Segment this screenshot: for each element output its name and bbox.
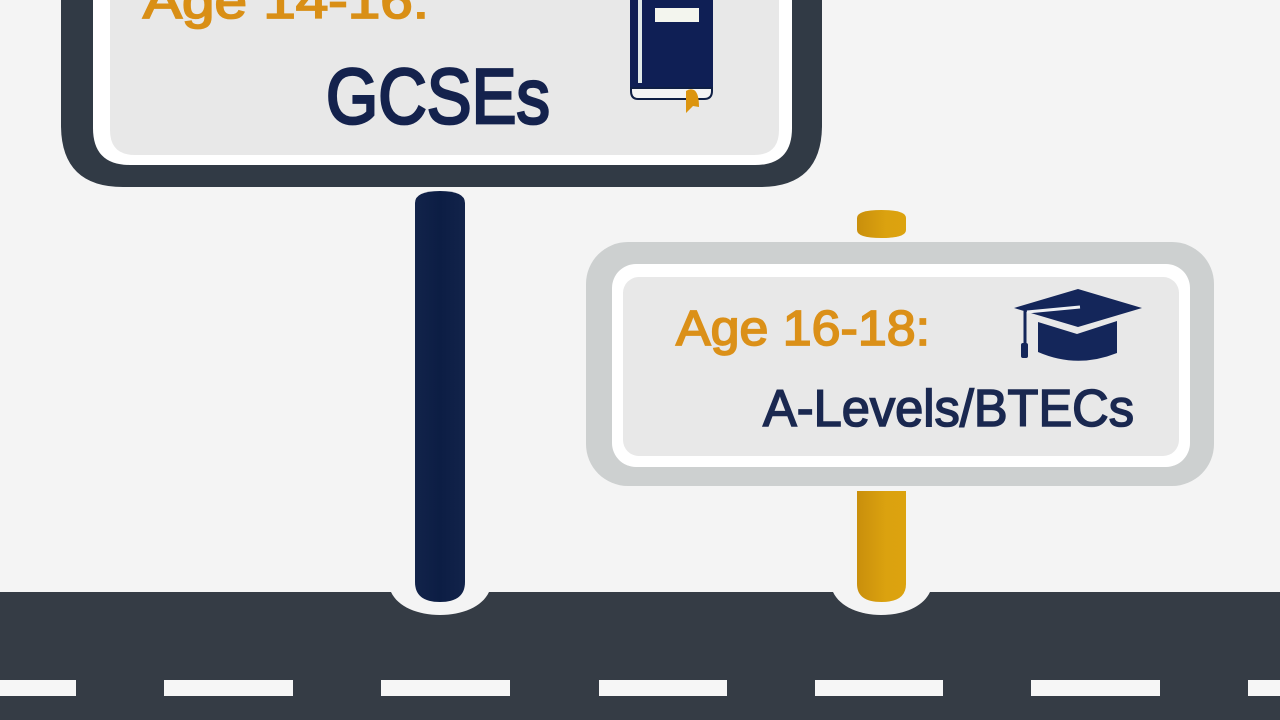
- A-Levels sign post: lower section: [857, 491, 906, 602]
- sign face: [623, 277, 1179, 456]
- label: GCSEs: GCSEs: [326, 52, 550, 140]
- icon: graduation cap: [1014, 289, 1142, 361]
- sign frame: [586, 242, 1214, 486]
- GCSE sign: [61, 0, 822, 187]
- road dashes: [0, 680, 1280, 696]
- sign frame: [61, 0, 822, 187]
- GCSE sign post: [415, 191, 465, 602]
- sign face: [110, 0, 779, 155]
- sign white border: [612, 264, 1190, 467]
- icon: book: [630, 0, 713, 113]
- label: A-Levels/BTECs: A-Levels/BTECs: [763, 380, 1134, 438]
- A-Levels sign: [586, 242, 1214, 486]
- road notch: A-Levels post: [833, 592, 930, 615]
- heading: Age 16-18: Age 16-18:: [676, 302, 930, 356]
- A-Levels sign post: top cap: [857, 210, 906, 238]
- road: [0, 592, 1280, 720]
- road notch: GCSE post: [391, 592, 489, 615]
- sign white border: [93, 0, 792, 165]
